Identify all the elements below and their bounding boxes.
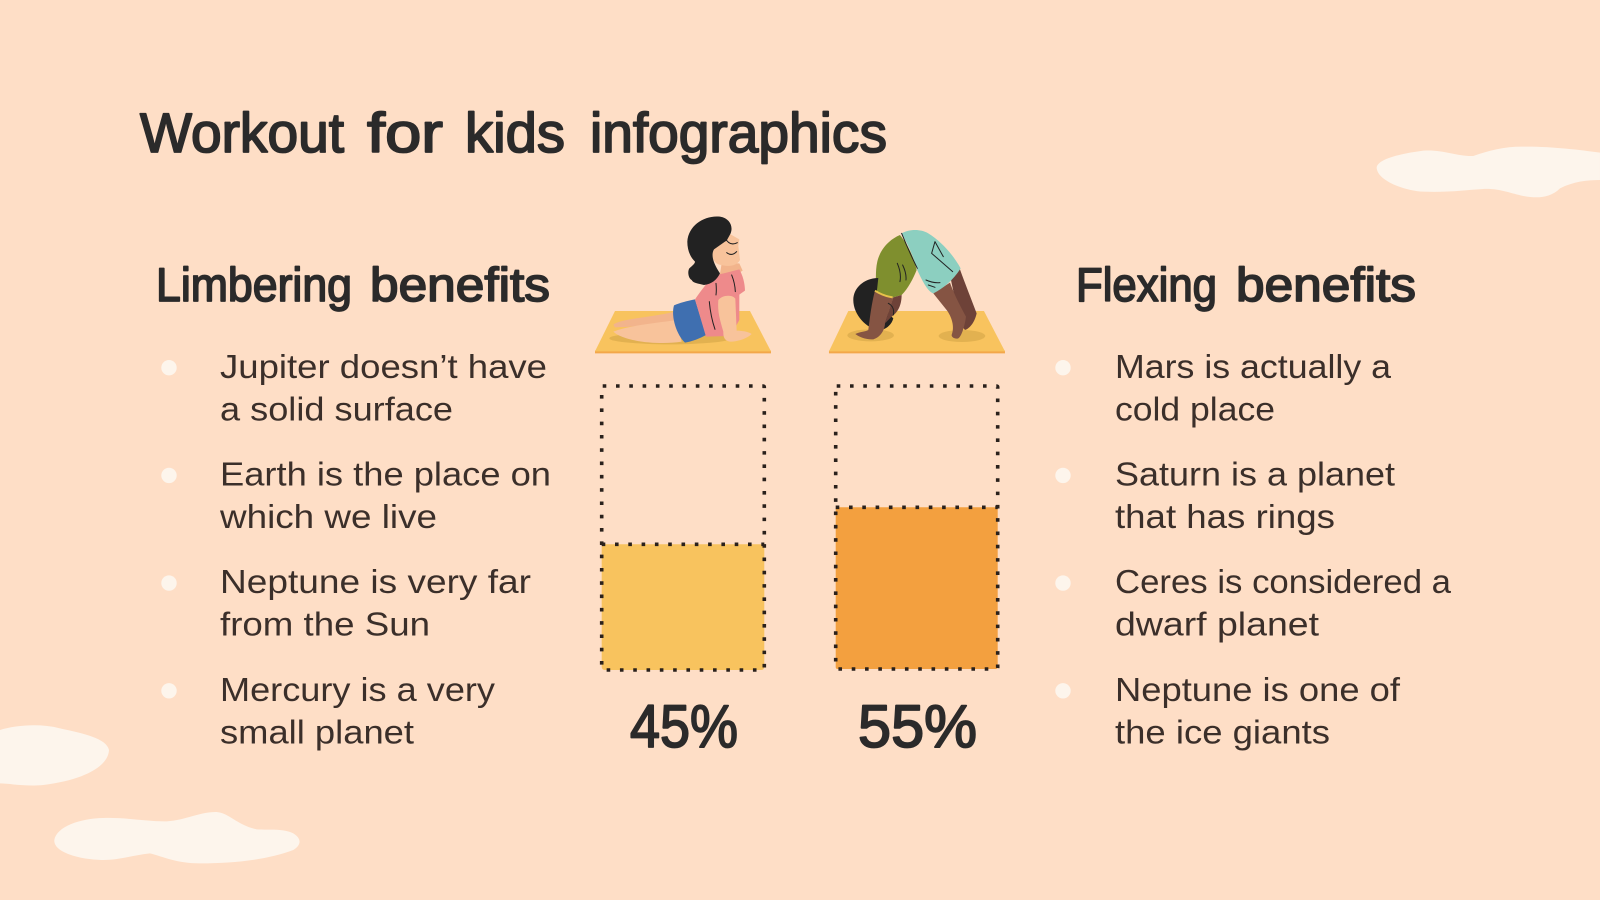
panel: flexing benefits [1055, 258, 1451, 752]
title [140, 101, 887, 164]
bullet item 4: small planet [220, 714, 415, 752]
bullet item 1: Mars is actually a [1115, 349, 1391, 386]
bullet item 3: from the Sun [220, 606, 430, 644]
bullet item 3 [1055, 564, 1451, 644]
heading: flexing benefits: benefits [1236, 258, 1416, 311]
bullet item 1: a solid surface [220, 392, 453, 428]
heading: limbering benefits: benefits [370, 258, 550, 311]
child figure [853, 230, 977, 339]
value: 45%: 45% [630, 693, 738, 760]
value: 55%: 55% [858, 693, 977, 760]
bar fill [836, 507, 998, 669]
cloud: top right [1377, 147, 1600, 197]
bullet item 1: cold place [1115, 392, 1275, 428]
bullet item 1 [1055, 349, 1391, 428]
heading: limbering benefits: Limbering [156, 258, 352, 311]
bullet item 2: Earth is the place on [220, 456, 551, 494]
bullet item 2 [161, 456, 551, 536]
bullet item 4: the ice giants [1115, 714, 1330, 752]
dotted track [602, 386, 764, 670]
cloud: bottom left [54, 812, 300, 863]
bullet item 1 [161, 349, 547, 428]
bullet item 4: Neptune is one of [1115, 672, 1401, 709]
bar chart: 55% flexing [836, 386, 998, 669]
title: for [367, 101, 443, 164]
bullet item 2: that has rings [1115, 499, 1335, 536]
list: limbering benefits [161, 349, 551, 752]
bullet item 3: dwarf planet [1115, 606, 1320, 644]
yoga mat [595, 311, 771, 353]
title: Workout [140, 101, 344, 164]
bullet item 3: Neptune is very far [220, 564, 531, 601]
bullet item 2: which we live [219, 499, 437, 536]
bar fill [602, 544, 764, 670]
bullet item 2: Saturn is a planet [1115, 456, 1396, 494]
bullet item 3 [161, 564, 531, 644]
heading: flexing benefits [1076, 258, 1416, 311]
title: kids [465, 101, 565, 164]
yoga mat [829, 311, 1005, 353]
bullet item 4 [161, 672, 495, 752]
bar chart: 45% limbering [602, 386, 764, 670]
dotted track [836, 386, 998, 669]
bullet item 4 [1055, 672, 1401, 752]
girl figure [613, 216, 752, 343]
bullet item 3: Ceres is considered a [1115, 564, 1451, 601]
list: flexing benefits [1055, 349, 1451, 752]
illustration: girl in cobra pose on mat [595, 216, 771, 353]
title: infographics [590, 101, 887, 164]
bullet item 2 [1055, 456, 1396, 536]
bullet item 1: Jupiter doesn’t have [220, 349, 547, 386]
heading: flexing benefits: Flexing [1076, 258, 1217, 311]
bullet item 4: Mercury is a very [220, 672, 495, 709]
heading: limbering benefits [156, 258, 550, 311]
panel: limbering benefits [156, 258, 551, 752]
illustration: child in downward dog pose on mat [829, 230, 1005, 353]
cloud: left [0, 725, 109, 785]
